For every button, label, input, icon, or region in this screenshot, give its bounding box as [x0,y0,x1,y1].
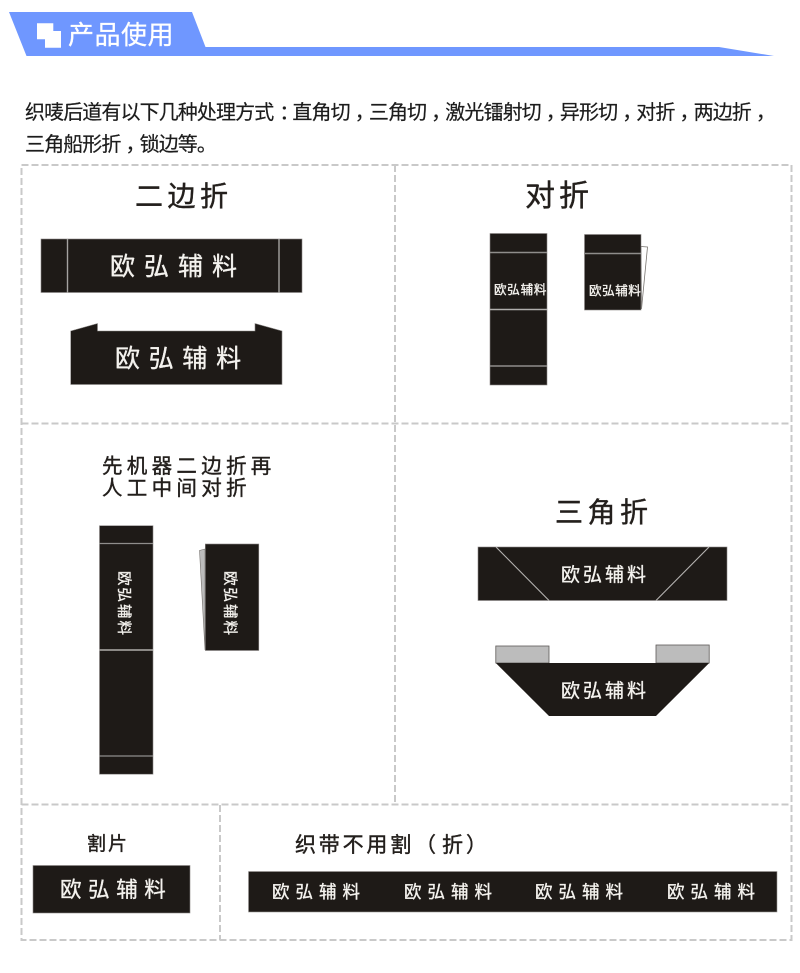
heading: woven ribbon: 折 [442,834,466,857]
label: cut piece: 欧弘辅料 [60,878,172,902]
icon: overlapping squares [37,23,61,48]
label: ribbon strip: 欧弘辅料 [667,882,761,902]
label: folded triangle fold: 欧弘辅料 [561,680,649,702]
heading: triangle fold: 三角折 [555,497,653,528]
panel: machine two-side fold then manual center fold [100,455,276,774]
heading: two-side fold: 二边折 [135,181,233,212]
heading: machine then manual fold: 先机器二边折再 [102,455,276,478]
label: flat center fold: 欧弘辅料 [494,283,547,297]
label: folded triangle fold [496,645,709,716]
label: folded two-side fold: 欧弘辅料 [115,345,250,373]
label: folded center fold [584,234,648,310]
panel: two-side fold [41,181,302,384]
panel: cut piece [33,833,190,913]
label: ribbon strip: 欧弘辅料 [535,882,629,902]
section header banner [9,12,774,56]
label: flat two-side fold: 欧弘辅料 [110,253,246,281]
label: folded center fold: 欧弘辅料 [589,284,641,298]
intro paragraph [25,101,775,156]
heading: machine then manual fold: 人工中间对折 [102,477,251,500]
heading: cut piece: 割片 [87,833,129,855]
label: flat center fold [490,234,547,385]
label: ribbon strip: 欧弘辅料 [272,882,366,902]
heading: machine then manual fold [102,455,276,500]
label: flat vertical: 欧弘辅料 [115,571,132,637]
heading: center fold: 对折 [525,180,593,213]
header title: 产品使用 [68,20,174,50]
label: flat triangle fold [478,547,727,600]
label: ribbon strip [248,872,777,912]
intro paragraph: 三角船形折，锁边等。 [25,133,216,156]
label: flat triangle fold: 欧弘辅料 [561,564,649,586]
intro paragraph: 织唛后道有以下几种处理方式 ：直角切，三角切，激光镭射切，异形切，对折，两边折， [25,101,775,124]
heading: woven ribbon: （ [415,834,439,857]
heading: woven ribbon: ） [466,834,490,857]
label: folded vertical [200,544,259,650]
panel: center fold [490,180,648,385]
label: folded two-side fold [71,324,282,384]
label: flat two-side fold [41,239,302,292]
label: folded vertical: 欧弘辅料 [221,571,238,637]
panel: woven ribbon, no cut [248,834,777,912]
label: ribbon strip: 欧弘辅料 [404,882,498,902]
label: flat vertical [100,526,153,774]
panel: triangle fold [478,497,727,716]
label: cut piece [33,866,190,913]
heading: woven ribbon: 织带不用割 [295,834,414,857]
